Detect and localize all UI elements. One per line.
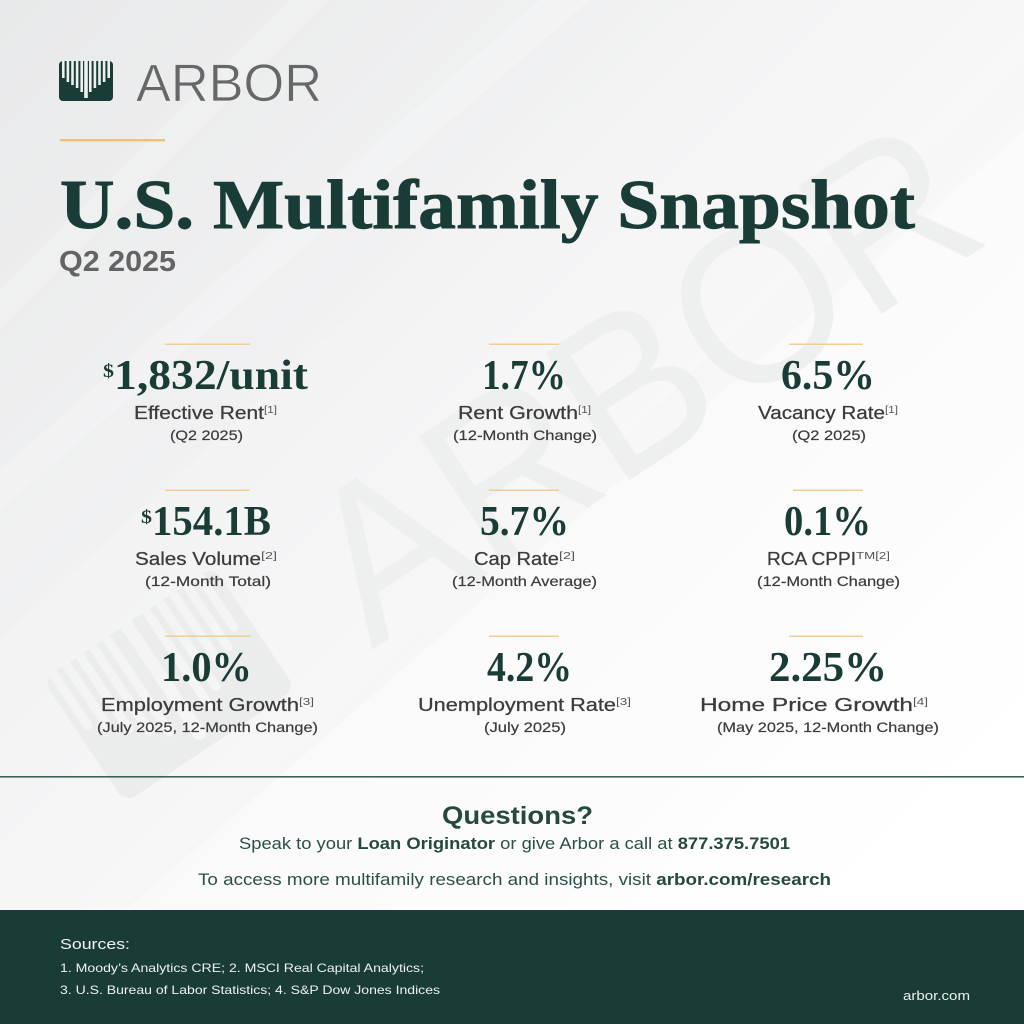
heading: questions: Questions? (442, 802, 593, 830)
stat: vacancy rate: Vacancy Rate (758, 403, 885, 423)
accent rule (60, 139, 165, 141)
subtitle: Q2 2025 (59, 246, 176, 278)
sources heading: Sources: (60, 936, 130, 953)
stat: vacancy rate: (Q2 2025) (792, 427, 866, 443)
sources line 2: 3. U.S. Bureau of Labor Statistics; 4. S&P Dow Jones Indices (60, 983, 440, 997)
stat: vacancy rate (758, 344, 898, 443)
stat: rent growth: (12-Month Change) (453, 427, 597, 443)
stat: cap rate: [2] (559, 550, 575, 562)
stat: employment growth (97, 636, 318, 735)
stat: sales volume: $ (141, 507, 152, 528)
watermark: logo mark (43, 566, 296, 803)
stat: employment growth: (July 2025, 12-Month Change) (97, 719, 318, 735)
contact line: Speak to your Loan Originator or give Arbor a call at 877.375.7501 (239, 835, 790, 853)
stat: home price growth: Home Price Growth (700, 695, 913, 715)
stat: sales volume: 154.1B (152, 499, 271, 545)
stat: sales volume: Sales Volume (135, 549, 261, 569)
stat: unemployment rate: (July 2025) (484, 719, 566, 735)
stat: RCA CPPI: 0.1% (784, 499, 871, 545)
stat: sales volume: [2] (261, 550, 277, 562)
stat: cap rate (452, 490, 597, 589)
research line: To access more multifamily research and insights, visit arbor.com/research (198, 871, 831, 889)
stat: home price growth: 2.25% (769, 645, 887, 691)
stat: employment growth: [3] (299, 696, 314, 708)
stat: effective rent (103, 344, 308, 443)
panel: questions (198, 802, 831, 889)
stat: cap rate: 5.7% (480, 499, 569, 545)
stat: effective rent: [1] (264, 404, 277, 416)
stat: RCA CPPI: RCA CPPI (767, 549, 856, 569)
stat: rent growth (453, 344, 597, 443)
stat: rent growth: Rent Growth (458, 403, 578, 423)
icon: Arbor mark (59, 61, 113, 101)
stat: unemployment rate: [3] (616, 696, 631, 708)
stat: home price growth: [4] (913, 696, 928, 708)
stat: cap rate: (12-Month Average) (452, 573, 597, 589)
stat: effective rent: Effective Rent (134, 403, 264, 423)
stat: vacancy rate: [1] (885, 404, 898, 416)
divider (0, 776, 1024, 778)
stat: unemployment rate (418, 636, 631, 735)
stat: unemployment rate: 4.2% (487, 645, 572, 691)
stat: effective rent: $ (103, 361, 114, 382)
title: U.S. Multifamily Snapshot (60, 167, 915, 244)
stat: RCA CPPI: (12-Month Change) (757, 573, 900, 589)
stat: home price growth: (May 2025, 12-Month Change) (717, 719, 939, 735)
wordmark: ARBOR (136, 54, 322, 113)
website: arbor.com (903, 988, 970, 1003)
stat: unemployment rate: Unemployment Rate (418, 695, 616, 715)
stat: sales volume: (12-Month Total) (145, 573, 271, 589)
stat: rent growth: 1.7% (482, 353, 566, 399)
stat: home price growth (700, 636, 939, 735)
stat: effective rent: 1,832/unit (114, 353, 308, 399)
panel: sources footer (0, 910, 1024, 1024)
stat: employment growth: 1.0% (161, 645, 252, 691)
stat: vacancy rate: 6.5% (781, 353, 875, 399)
sources line 1: 1. Moody’s Analytics CRE; 2. MSCI Real Capital Analytics; (60, 961, 424, 975)
stat: sales volume (135, 490, 277, 589)
stat: employment growth: Employment Growth (101, 695, 299, 715)
stat: RCA CPPI: TM[2] (856, 550, 890, 562)
logo (59, 54, 322, 113)
stat: rent growth: [1] (578, 404, 591, 416)
stat: effective rent: (Q2 2025) (170, 427, 243, 443)
stat: RCA CPPI (757, 490, 900, 589)
stat: cap rate: Cap Rate (474, 549, 559, 569)
